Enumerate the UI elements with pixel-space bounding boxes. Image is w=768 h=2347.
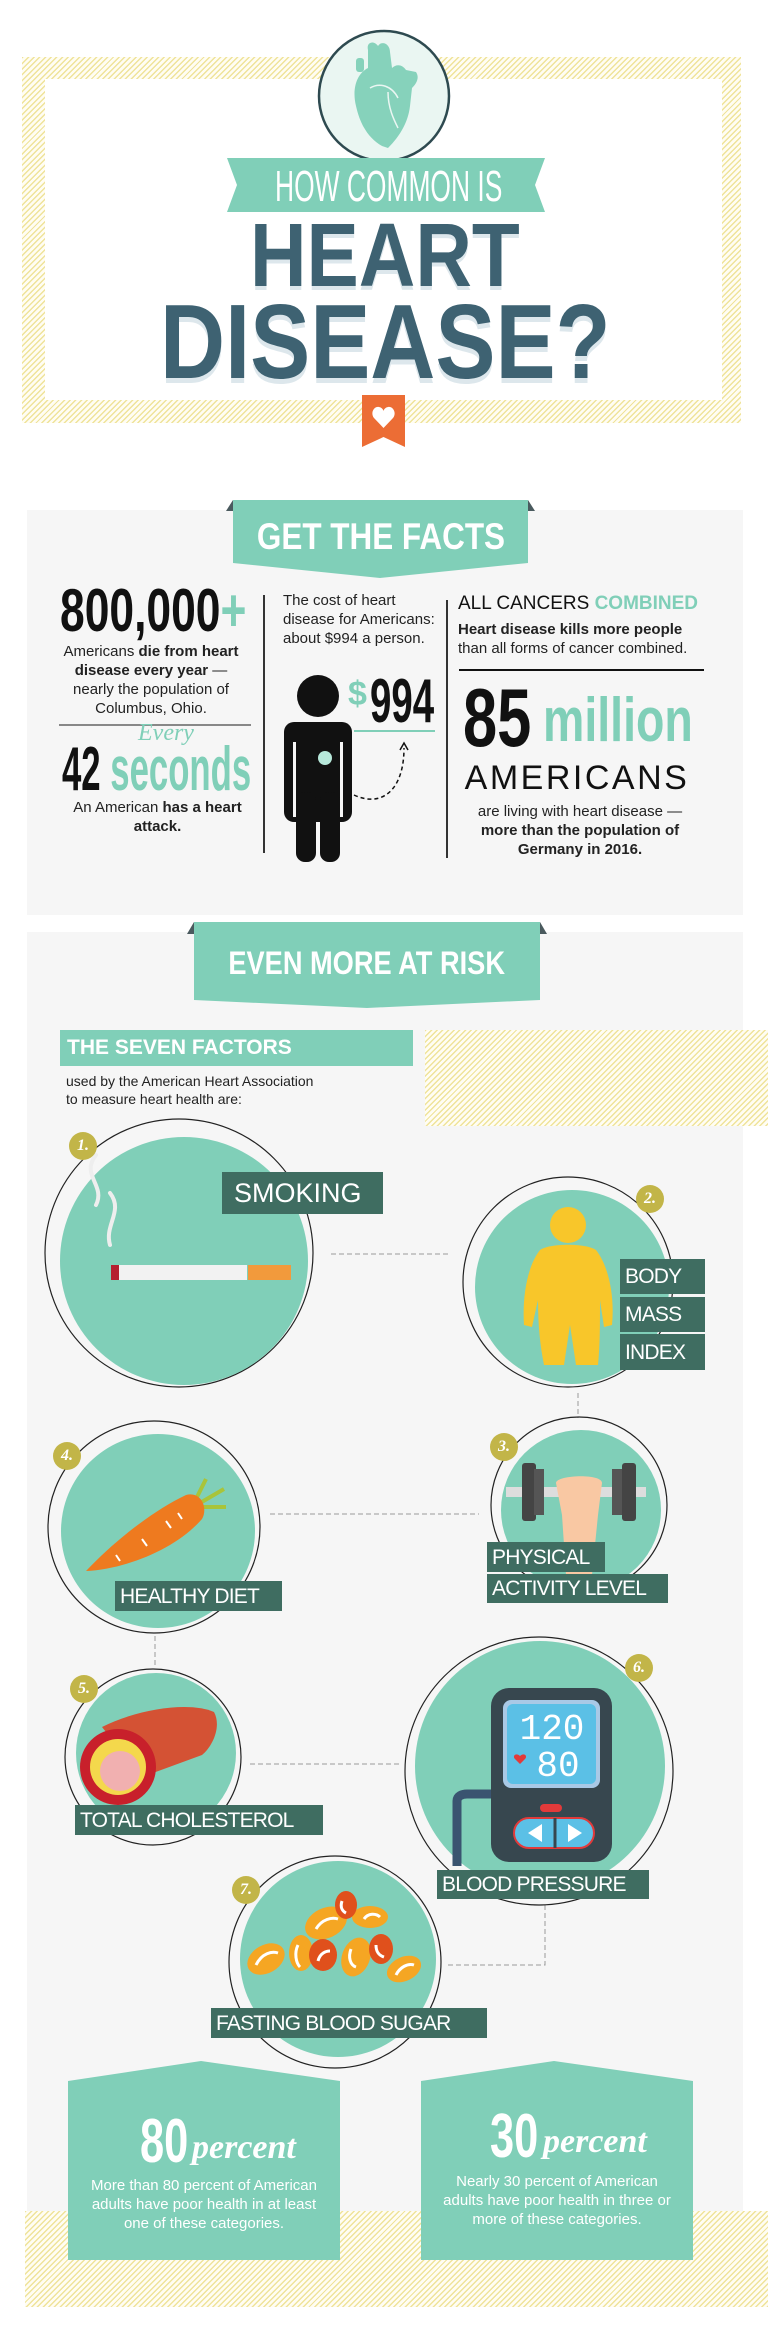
label: blood pressure (437, 1870, 649, 1899)
panel: get the facts (27, 510, 743, 915)
title: heart: HEART (250, 206, 520, 306)
ribbon: even more at risk (187, 922, 547, 1008)
factor 5: cholesterol (64, 1668, 242, 1846)
icon: orange bookmark heart (362, 395, 405, 447)
badge 1: 1. (77, 1137, 89, 1154)
box: 80 percent: More than 80 percent of American (91, 2177, 317, 2194)
label: body mass index: INDEX (625, 1340, 685, 1364)
factor 6: blood pressure: 80 (536, 1746, 580, 1787)
factor 4: healthy diet (47, 1420, 261, 1634)
label: blood pressure: BLOOD PRESSURE (442, 1873, 626, 1896)
factor 6: blood pressure: 6. (633, 1659, 645, 1676)
factor 7: fasting blood sugar (228, 1855, 442, 2069)
label: total cholesterol: TOTAL CHOLESTEROL (80, 1808, 294, 1832)
factor 4: healthy diet: 4. (61, 1447, 73, 1464)
header frame (22, 57, 741, 423)
ribbon: get the facts: GET THE FACTS (256, 516, 505, 557)
text: all cancers combined: ALL CANCERS COMBINED (458, 593, 698, 614)
bottom stripes (25, 2211, 768, 2307)
text: used by (66, 1073, 313, 1107)
panel: even more at risk (27, 932, 743, 2307)
box: 30 percent: more of these categories. (472, 2211, 642, 2228)
factor 5: cholesterol: 5. (78, 1680, 90, 1697)
box: 30 percent: percent (543, 2123, 647, 2160)
box: 80 percent: percent (192, 2129, 296, 2166)
factor 6: blood pressure (404, 1636, 674, 1906)
label: healthy diet: HEALTHY DIET (120, 1584, 259, 1608)
title: disease: DISEASE? (160, 283, 611, 401)
ribbon: how common is (227, 158, 545, 212)
box: 30 percent: adults have poor health in three or (443, 2192, 671, 2209)
label: fasting blood sugar (211, 2008, 487, 2038)
box: 80 percent: adults have poor health in at least (92, 2196, 316, 2213)
connectors (154, 1254, 578, 1966)
factor 7: fasting blood sugar: 7. (240, 1881, 252, 1898)
stat: 800,000+: 800,000+ (60, 577, 246, 644)
factor 3: physical activity: 3. (498, 1438, 510, 1455)
text: used by: used by the American Heart Association (66, 1073, 313, 1089)
label: fasting blood sugar: FASTING BLOOD SUGAR (216, 2012, 451, 2034)
text: heart attack: An American has a heart attack. (73, 799, 242, 835)
box: 80 percent: one of these categories. (124, 2215, 284, 2232)
ribbon: how common is: HOW COMMON IS (275, 162, 502, 211)
factor 2: body mass index: 2. (644, 1190, 656, 1207)
badge 1 (69, 1132, 97, 1160)
text: used by: to measure heart health are: (66, 1091, 242, 1107)
label: physical activity level: ACTIVITY LEVEL (492, 1577, 646, 1600)
label: smoking: SMOKING (234, 1178, 362, 1208)
label: smoking (222, 1172, 383, 1214)
stat: every 42 seconds: 42 seconds (62, 735, 251, 804)
label: body mass index: MASS (625, 1303, 681, 1326)
ribbon: get the facts (226, 500, 535, 578)
text: Heart disease kills more people than all forms of cancer combined. (458, 621, 687, 657)
label: physical activity level (487, 1542, 668, 1603)
ribbon: even more at risk: EVEN MORE AT RISK (229, 945, 505, 981)
icon: heart in circle (318, 30, 450, 158)
factor 1: smoking (44, 1118, 383, 1388)
box: 30 percent: Nearly 30 percent of American (456, 2173, 658, 2190)
label: total cholesterol (75, 1805, 323, 1835)
box: 80 percent (68, 2061, 340, 2260)
stat: $994: 994 (370, 667, 434, 736)
label: body mass index (620, 1259, 705, 1370)
box: 30 percent (421, 2061, 693, 2260)
label: body mass index: BODY (625, 1265, 681, 1288)
heading: seven factors: THE SEVEN FACTORS (67, 1036, 292, 1059)
stat: every 42 seconds: Every (138, 720, 194, 746)
label: physical activity level: PHYSICAL (492, 1546, 589, 1568)
text: cost: The cost of heart disease for Americans: about $994 a person. (283, 592, 435, 647)
stat: $994: $ (348, 675, 367, 713)
arrow: dashed (354, 742, 409, 800)
factor 2: body mass index (462, 1176, 705, 1388)
icon: person (284, 675, 352, 862)
text: AMERICANS (465, 759, 689, 797)
stat: 85 million: 85 (463, 671, 531, 764)
text: living with: are living with heart disease — more than the population of Germany in 2016. (478, 803, 682, 858)
factor 6: blood pressure: 120 (520, 1709, 584, 1750)
box: 80 percent: 80 (140, 2107, 188, 2176)
factor 3: physical activity (490, 1416, 668, 1574)
label: healthy diet (115, 1581, 282, 1611)
text: million (543, 686, 693, 755)
heading: seven factors (60, 1030, 413, 1066)
box: 30 percent: 30 (490, 2102, 538, 2171)
text: deaths: Americans die from heart disease every year — nearly the population of Columbus, Ohio. (63, 643, 239, 717)
